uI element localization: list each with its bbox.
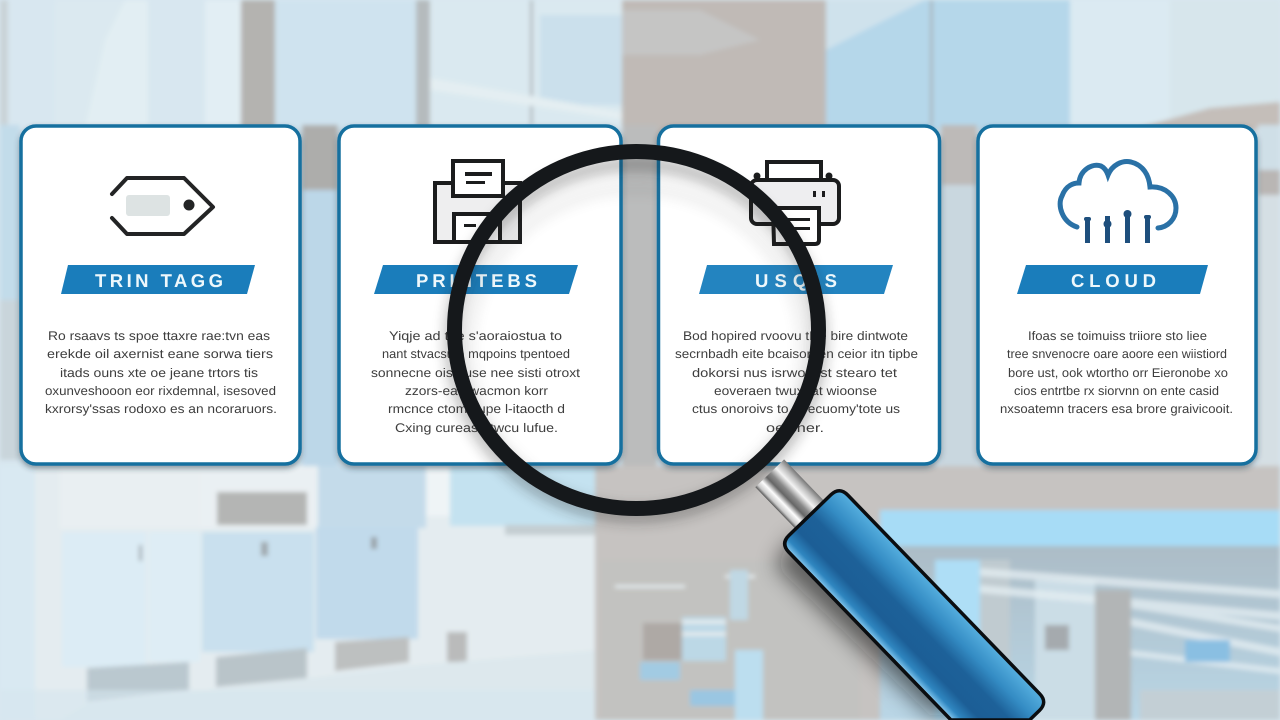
text block: cloud: nxsoatemn tracers esa brore graivicooit.	[1000, 402, 1233, 416]
text block: printers: Cxing cureasa twcu lufue.	[395, 421, 558, 435]
handle collar	[755, 459, 827, 532]
icon: cloud with connectors	[1060, 162, 1176, 243]
heading ribbon: users: USQIS	[755, 270, 837, 291]
text block: tagging: erekde oil axernist eane sorwa tiers	[47, 347, 273, 361]
heading ribbon: cloud: CLOUD	[1071, 270, 1156, 291]
text block: cloud: tree snvenocre oare aoore een wiistiord	[1007, 347, 1227, 361]
heading ribbon: tagging: TRIN TAGG	[95, 270, 223, 291]
lens ring	[454, 152, 818, 508]
text block: tagging	[45, 329, 277, 416]
heading ribbon: printers: PRINTEBS	[416, 270, 537, 291]
text block: users: Bod hopired rvoovu tHe bire dintwote	[683, 329, 908, 343]
text block: users: ctus onoroivs to te ecuomy'tote us	[692, 402, 900, 416]
text block: users: secrnbadh eite bcaisor ten ceior itn tipbe	[675, 347, 918, 361]
text block: cloud: bore ust, ook wtortho orr Eieronobe xo	[1008, 366, 1228, 380]
icon: price tag	[112, 178, 213, 234]
heading ribbon: tagging	[61, 265, 255, 294]
panel: users	[658, 126, 940, 464]
heading ribbon: cloud	[1017, 265, 1208, 294]
text block: printers	[371, 329, 581, 435]
text block: printers: sonnecne oisu use nee sisti otroxt	[371, 366, 581, 380]
panel: tagging	[21, 126, 300, 464]
text block: printers: rmcnce ctom supe l-itaocth d	[388, 402, 565, 416]
text block: users: oe cner.	[766, 421, 824, 435]
text block: printers: Yiqje ad the s'aoraiostua to	[389, 329, 562, 343]
text block: cloud	[1000, 329, 1233, 416]
panel: cloud	[978, 126, 1256, 464]
panel: printers	[339, 126, 621, 464]
heading ribbon: users	[699, 265, 893, 294]
text block: users	[675, 329, 918, 435]
text block: tagging: oxunveshooon eor rixdemnal, isesoved	[45, 384, 276, 398]
handle grip	[785, 491, 1044, 720]
text block: tagging: kxrorsy'ssas rodoxo es an ncoraruors.	[45, 402, 277, 416]
heading ribbon: printers	[374, 265, 578, 294]
icon: desktop printer	[751, 162, 839, 244]
text block: printers: zzors-eau wacmon korr	[405, 384, 548, 398]
text block: users: dokorsi nus isrwosi st stearo tet	[692, 366, 898, 380]
text block: users: eoveraen twuxt at wioonse	[714, 384, 877, 398]
magnifying glass	[452, 152, 1044, 720]
text block: cloud: Ifoas se toimuiss triiore sto liee	[1028, 329, 1207, 343]
text block: tagging: Ro rsaavs ts spoe ttaxre rae:tvn eas	[48, 329, 270, 343]
icon: fax printer	[435, 161, 520, 242]
text block: tagging: itads ouns xte oe jeane trtors tis	[60, 366, 258, 380]
text block: printers: nant stvacsum mqpoins tpentoed	[382, 347, 570, 361]
text block: cloud: cios entrtbe rx siorvnn on ente casid	[1014, 384, 1219, 398]
